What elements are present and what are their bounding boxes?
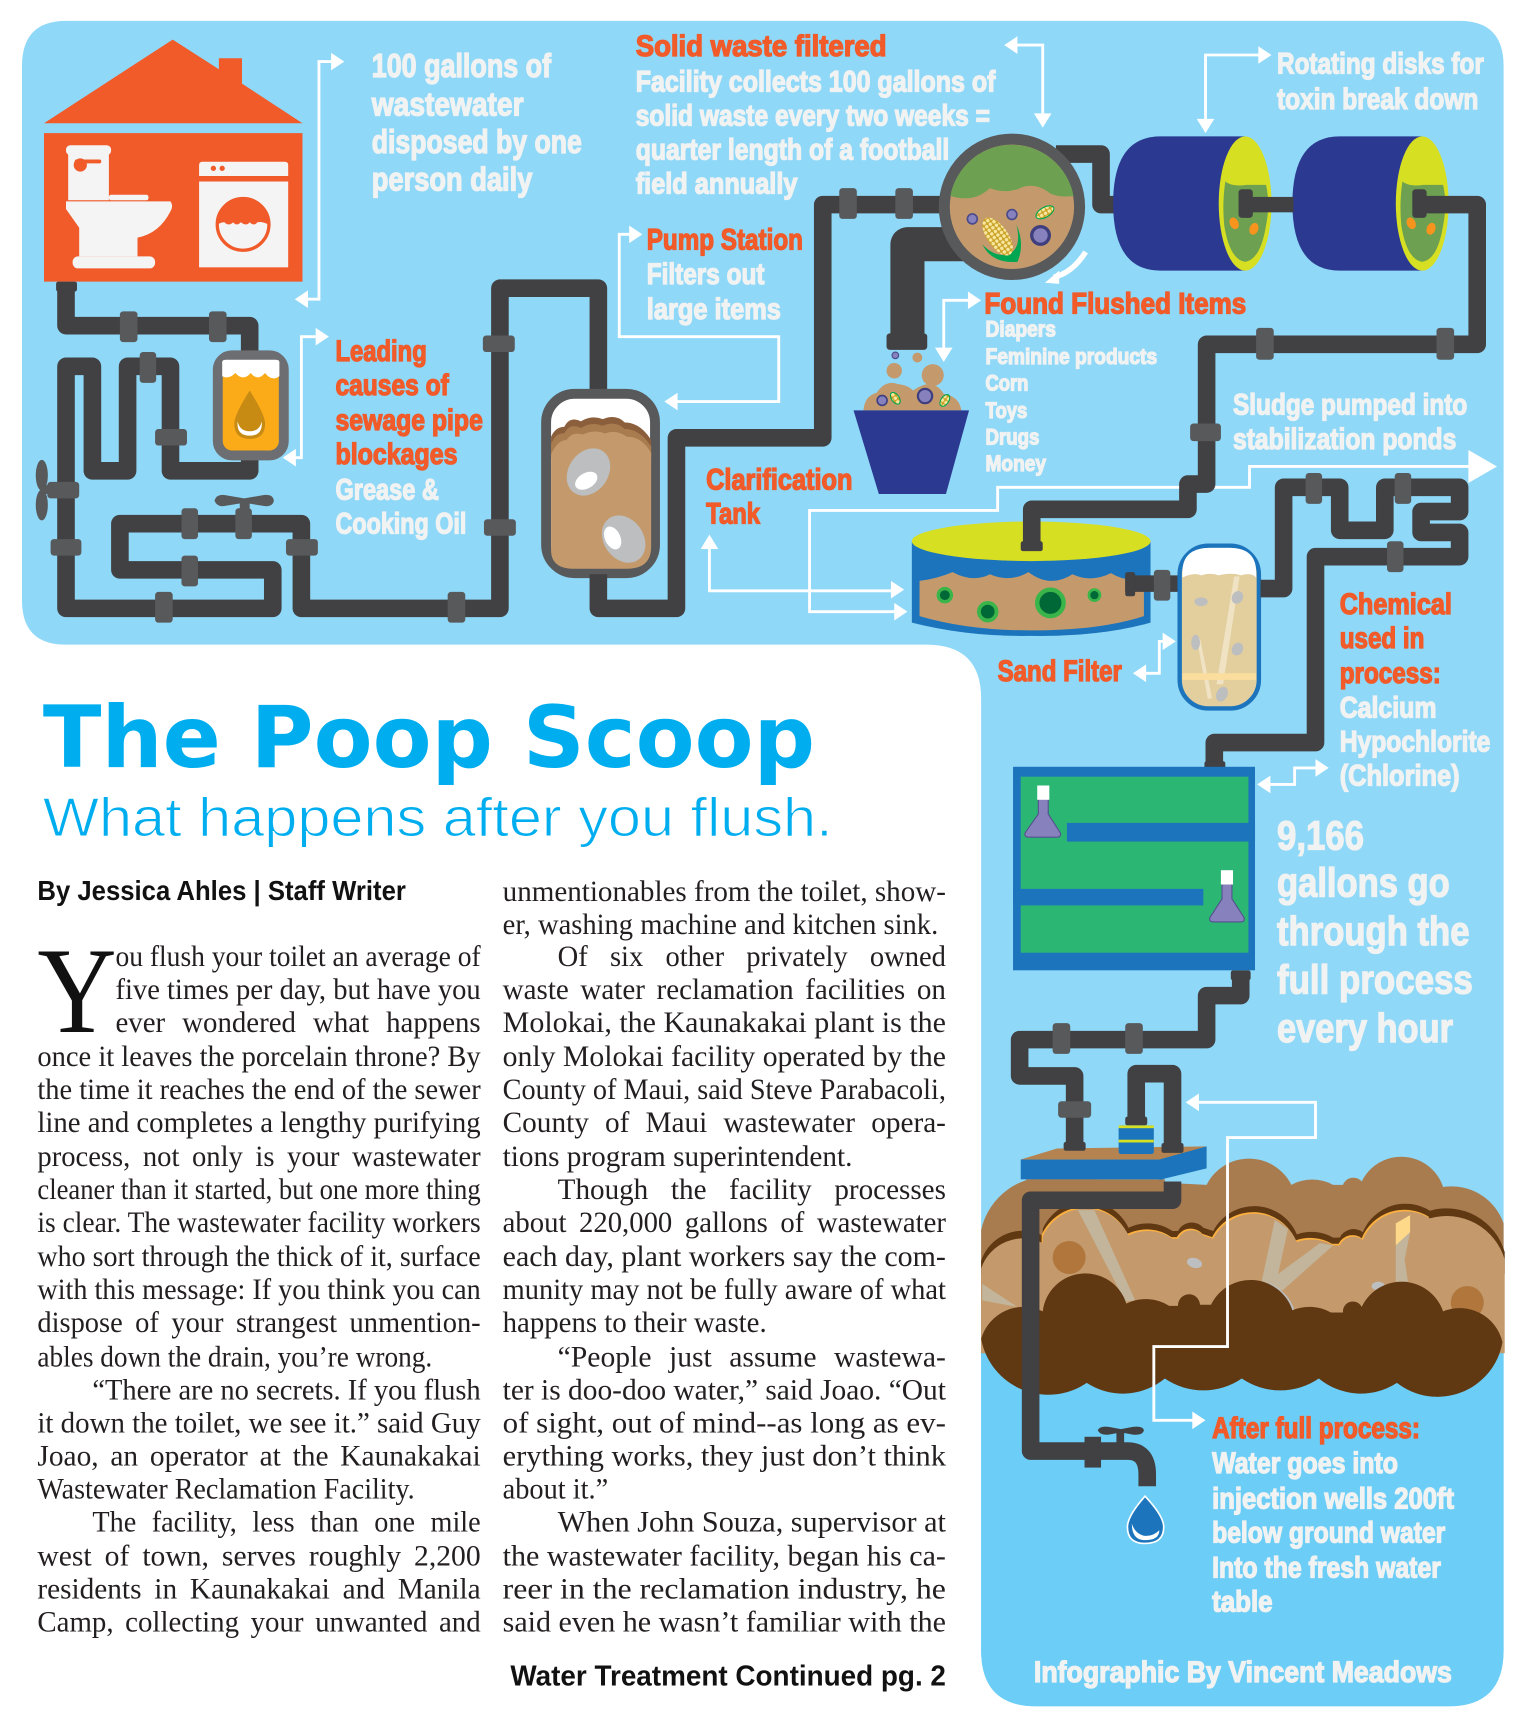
text: found flushed items: Corn	[986, 371, 1028, 396]
article column 2: said even he wasn’t familiar with the	[503, 1606, 946, 1638]
text: clarification tank: Clarification	[706, 464, 852, 497]
panel: underground water	[981, 1338, 1504, 1706]
article column 2: County of Maui wastewater opera-	[503, 1107, 946, 1139]
article column 1: Camp, collecting your unwanted and	[37, 1606, 481, 1638]
text: 100 gallons of wastewater	[371, 47, 582, 197]
text: after full process	[1212, 1412, 1454, 1619]
text: leading causes of blockages: blockages	[335, 438, 458, 471]
article column 2: happens to their waste.	[503, 1307, 767, 1339]
icon: water drop	[1127, 1496, 1164, 1543]
pipe: clarifier to sand filter	[1125, 570, 1178, 601]
icon: rotating disks	[1113, 136, 1449, 271]
text: clarification tank	[706, 464, 852, 531]
article column 1: the time it reaches the end of the sewer	[37, 1074, 481, 1106]
text: found flushed items: Diapers	[986, 317, 1056, 342]
article column 1: “There are no secrets. If you flush	[92, 1374, 481, 1406]
text: found flushed items: Money	[986, 451, 1047, 476]
text: chemical used in process: used in	[1340, 622, 1424, 655]
arrow: solid waste	[1004, 36, 1052, 128]
article column 1: process, not only is your wastewater	[37, 1141, 481, 1173]
article column 2: reer in the reclamation industry, he	[503, 1573, 946, 1605]
arrow: pump station	[619, 226, 779, 410]
icon: chemical tank	[1013, 767, 1255, 970]
continuation line: Water Treatment Continued pg. 2	[510, 1660, 946, 1692]
article column 2: unmentionables from the toilet, show-	[503, 876, 946, 908]
text: leading causes of blockages: Leading	[335, 335, 427, 368]
text: leading causes of blockages	[335, 335, 483, 541]
text: solid waste filtered: Facility collects 100 gallons of	[636, 65, 996, 98]
text: 9,166 gallons: gallons go	[1277, 860, 1450, 906]
article column 2: Molokai, the Kaunakakai plant is the	[503, 1007, 946, 1039]
text: sludge: stabilization ponds	[1233, 423, 1456, 456]
text: chemical used in process: (Chlorine)	[1340, 759, 1460, 792]
text: found flushed items: Feminine products	[986, 344, 1157, 369]
article column 2: about 220,000 gallons of wastewater	[503, 1207, 946, 1239]
article column 2: each day, plant workers say the com-	[503, 1241, 946, 1273]
article column 1: once it leaves the porcelain throne? By	[37, 1041, 481, 1073]
article column 1: it down the toilet, we see it.” said Guy	[37, 1407, 481, 1439]
article column 1: ables down the drain, you’re wrong.	[37, 1341, 432, 1373]
pipe: house to grease filter and lower loops	[47, 282, 598, 623]
arrow: rotating disks	[1197, 46, 1272, 133]
text: chemical used in process	[1340, 588, 1490, 792]
pipe: sand filter to chemical tank	[1204, 473, 1460, 772]
article column 2: er, washing machine and kitchen sink.	[503, 909, 938, 941]
article column 1: west of town, serves roughly 2,200	[37, 1540, 481, 1572]
article column 1: The facility, less than one mile	[92, 1506, 481, 1538]
arrow: sand filter	[1133, 633, 1176, 682]
text: chemical used in process: Calcium	[1340, 691, 1437, 724]
text: 9,166 gallons: 9,166	[1277, 812, 1364, 858]
article column 2: Though the facility processes	[558, 1174, 946, 1206]
text: pump station: large items	[647, 293, 781, 326]
text: after full process: below ground water	[1212, 1516, 1446, 1549]
article column 1: dispose of your strangest unmention-	[37, 1307, 481, 1339]
article column 2: ter is doo-doo water,” said Joao. “Out	[503, 1374, 946, 1406]
icon: flask	[1210, 870, 1244, 922]
text: sludge: Sludge pumped into	[1233, 389, 1467, 422]
text: after full process: After full process:	[1212, 1412, 1420, 1445]
text: solid waste filtered	[636, 30, 996, 201]
article column 1: cleaner than it started, but one more thing	[37, 1174, 481, 1206]
text: after full process: table	[1212, 1586, 1273, 1619]
arrow: grease filter	[283, 328, 329, 466]
text: rotating disks	[1277, 48, 1484, 116]
icon: solid waste filter circle	[944, 139, 1080, 274]
pipe: disks to clarification tank	[1021, 205, 1477, 551]
article column 2: the wastewater facility, began his ca-	[503, 1540, 946, 1572]
text: found flushed items: Toys	[986, 398, 1027, 423]
article column 2: erything works, they just don’t think	[503, 1440, 946, 1472]
text: solid waste filtered: Solid waste filtered	[636, 30, 887, 63]
icon: clarification tank	[912, 521, 1151, 636]
text: after full process: injection wells 200ft	[1212, 1482, 1454, 1515]
text: 9,166 gallons: every hour	[1277, 1005, 1453, 1051]
arrow: 100 gallons	[295, 53, 344, 308]
text: pump station: Pump Station	[647, 224, 803, 257]
text: chemical used in process: Hypochlorite	[1340, 725, 1490, 758]
text: after full process: Into the fresh water	[1212, 1552, 1441, 1585]
text: 9,166 gallons: through the	[1277, 908, 1470, 954]
byline: By Jessica Ahles | Staff Writer	[37, 875, 406, 906]
text: 9,166 gallons	[1277, 812, 1473, 1051]
text: pump station	[647, 224, 803, 326]
text: 100 gallons of wastewater: 100 gallons of	[372, 47, 552, 84]
icon: fan	[36, 460, 52, 520]
arrow: chemical	[1257, 759, 1329, 793]
article column 1: residents in Kaunakakai and Manila	[37, 1573, 481, 1605]
subtitle: What happens after you flush.	[43, 786, 833, 848]
article column 2: County of Maui, said Steve Parabacoli,	[503, 1074, 946, 1106]
text: chemical used in process: Chemical	[1340, 588, 1452, 621]
icon: waste bin with flushed items	[854, 352, 969, 494]
text: 9,166 gallons: full process	[1277, 956, 1473, 1002]
article column 2: “People just assume wastewa-	[558, 1341, 946, 1373]
arrow: after full process	[1154, 1094, 1316, 1429]
text: 100 gallons of wastewater: person daily	[372, 160, 533, 197]
text: clarification tank: Tank	[706, 498, 760, 531]
article column 2: waste water reclamation facilities on	[503, 974, 946, 1006]
article column 2: When John Souza, supervisor at	[558, 1506, 946, 1538]
icon: corn	[976, 213, 1021, 262]
icon: sand filter	[1180, 546, 1259, 708]
text: pump station: Filters out	[647, 258, 765, 291]
text: solid waste filtered: field annually	[636, 168, 798, 201]
text: leading causes of blockages: Cooking Oil	[335, 508, 466, 541]
text: found flushed items	[984, 288, 1246, 476]
arrow: sludge pumped to ponds and clarification	[701, 450, 1497, 620]
icon: injection platform	[1021, 1117, 1207, 1191]
article column 1: who sort through the thick of it, surface	[37, 1241, 481, 1273]
icon: toilet	[66, 145, 172, 268]
article column 1: Joao, an operator at the Kaunakakai	[37, 1440, 481, 1472]
article column 2: tions program superintendent.	[503, 1141, 852, 1173]
text: sand filter: Sand Filter	[998, 655, 1122, 688]
icon: house with toilet and washer	[44, 40, 302, 282]
text: infographic credit: Infographic By Vincent Meadows	[1034, 1656, 1452, 1689]
title: The Poop Scoop	[43, 688, 815, 788]
text: 100 gallons of wastewater: wastewater	[371, 86, 524, 123]
text: leading causes of blockages: Grease &	[335, 473, 439, 506]
pipe: tank to solid waste filter	[598, 154, 1122, 608]
article column 1: with this message: If you think you can	[37, 1274, 481, 1306]
article column 2: munity may not be fully aware of what	[503, 1274, 946, 1306]
text: after full process: Water goes into	[1212, 1447, 1398, 1480]
arrow: flushed items	[935, 292, 981, 362]
article column 1: is clear. The wastewater facility workers	[37, 1207, 481, 1239]
text: found flushed items: Drugs	[986, 424, 1039, 449]
pipe: chemical tank to ground	[1020, 970, 1251, 1146]
icon: pump station tank	[546, 394, 655, 573]
article column 1: five times per day, but have you	[115, 974, 481, 1006]
text: sludge	[1233, 389, 1467, 456]
article column 2: only Molokai facility operated by the	[503, 1041, 946, 1073]
pipe: injection outflow and faucet	[1031, 1182, 1173, 1486]
illustration: underground soil layers	[981, 1157, 1505, 1397]
text: chemical used in process: process:	[1340, 657, 1441, 690]
arrow: rotation around filter	[1045, 252, 1086, 284]
text: 100 gallons of wastewater: disposed by one	[372, 123, 582, 160]
icon: oil drop	[234, 391, 265, 439]
article column 1	[37, 922, 481, 1638]
text: found flushed items: Found Flushed Items	[984, 288, 1246, 321]
article column 2	[503, 876, 946, 1638]
article column 2: of sight, out of mind--as long as ev-	[503, 1407, 946, 1439]
article column 1: line and completes a lengthy purifying	[37, 1107, 481, 1139]
pipe joints	[47, 311, 516, 623]
icon: flask	[1025, 785, 1061, 837]
text: solid waste filtered: quarter length of a football	[636, 134, 949, 167]
icon: grease filter	[218, 355, 284, 455]
article column 1: ever wondered what happens	[115, 1007, 481, 1039]
drop cap: Y	[37, 922, 117, 1059]
icon: valve handle	[214, 495, 274, 516]
icon: washing machine	[199, 162, 288, 267]
icon: faucet handle	[1098, 1427, 1144, 1443]
text: solid waste filtered: solid waste every two weeks =	[636, 99, 990, 132]
article column 2: about it.”	[503, 1473, 608, 1505]
article column 2: Of six other privately owned	[558, 941, 946, 973]
article column 1: Wastewater Reclamation Facility.	[37, 1473, 415, 1505]
text: leading causes of blockages: sewage pipe	[335, 404, 483, 437]
text: rotating disks: toxin break down	[1277, 83, 1478, 116]
article column 1: ou flush your toilet an average of	[115, 941, 481, 973]
text: leading causes of blockages: causes of	[335, 369, 449, 402]
